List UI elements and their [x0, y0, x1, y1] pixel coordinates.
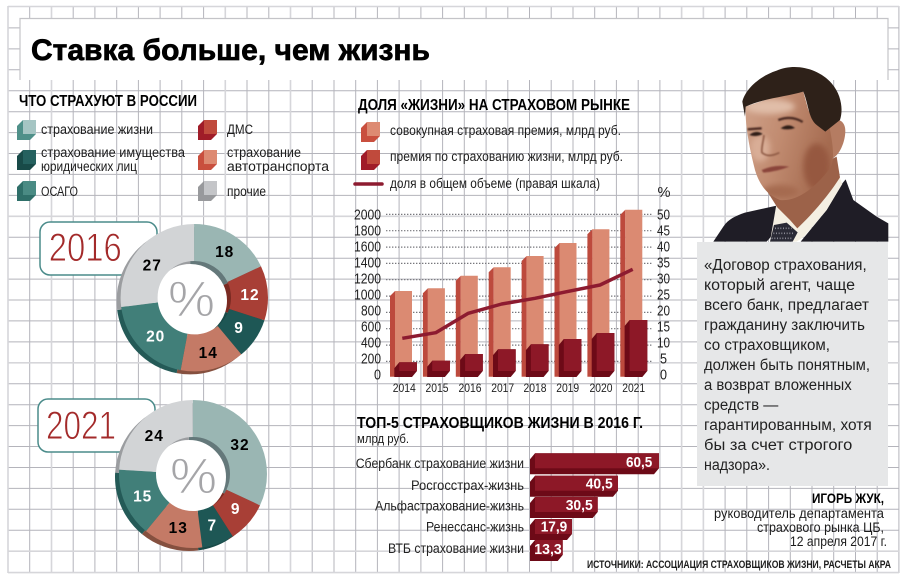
- face: [746, 92, 833, 200]
- donut chart 2016: %: [168, 271, 215, 327]
- donut chart 2021: [133, 418, 250, 537]
- row: VTB: [388, 540, 563, 561]
- row: Renaissance: [426, 519, 572, 540]
- legend: insurance types: [17, 120, 329, 201]
- legend item: total premium: [361, 122, 621, 142]
- donut chart 2021: 7: [207, 518, 217, 534]
- neck: [767, 157, 840, 228]
- legend item: motor insurance: автотранспорта: [227, 159, 329, 174]
- year labels: 2018: [524, 381, 547, 395]
- row: Alfa: 30,5: [566, 498, 593, 514]
- donut chart 2021: 15: [133, 488, 152, 506]
- quote box: гарантированным, хотя: [704, 417, 872, 434]
- left axis labels: 1800: [354, 224, 381, 240]
- quote box: [697, 242, 888, 486]
- right axis labels: 45: [657, 224, 670, 240]
- donut chart 2021: 13: [169, 520, 188, 537]
- right axis labels: 30: [657, 272, 670, 288]
- left axis labels: 1400: [354, 256, 381, 272]
- year labels: 2014: [393, 381, 416, 395]
- donut chart 2016: 20: [146, 328, 165, 346]
- quote attribution: руководитель департамента: [714, 506, 884, 521]
- heading: what is insured: ЧТО СТРАХУЮТ В РОССИИ: [19, 93, 197, 110]
- legend item: DMS: [198, 120, 253, 140]
- chart legend: [355, 122, 623, 191]
- year labels: 2017: [491, 381, 514, 395]
- donut chart 2021: %: [170, 448, 217, 504]
- legend item: motor insurance: страхование: [227, 145, 301, 160]
- legend item: OSAGO: [17, 181, 78, 201]
- legend item: life premium: премия по страхованию жизни, млрд руб.: [390, 149, 623, 164]
- legend item: total premium: совокупная страховая премия, млрд руб.: [390, 123, 621, 138]
- ear: [828, 120, 845, 159]
- quote box: гражданину заключить: [704, 317, 865, 334]
- heading: top 5 life insurers: млрд руб.: [357, 431, 409, 446]
- bar chart: top 5 insurers: [356, 453, 659, 561]
- donut chart 2016: [135, 243, 260, 362]
- hair: [742, 67, 842, 132]
- title: Ставка больше, чем жизнь: [31, 34, 430, 67]
- quote box: «Договор страхования,: [704, 257, 867, 274]
- left axis labels: 1000: [354, 288, 381, 304]
- quote box: надзора».: [704, 457, 770, 474]
- left axis labels: 800: [361, 304, 381, 320]
- row: Rosgosstrakh: [411, 476, 618, 497]
- donut chart 2016: 9: [234, 320, 244, 337]
- row: Alfa: [375, 497, 598, 518]
- donut chart 2021: 24: [145, 428, 164, 445]
- year labels: [393, 381, 645, 395]
- donut chart 2016: 14: [199, 345, 218, 362]
- row: VTB: 13,3: [534, 542, 562, 558]
- year badge 2016: [40, 222, 157, 275]
- quote box: а возврат вложенных: [704, 377, 852, 394]
- quote box: средств —: [704, 397, 779, 414]
- legend item: corporate property: [17, 145, 185, 174]
- quote box: всего банк, предлагает: [704, 297, 869, 314]
- quote box: бы за счет строгого: [704, 437, 852, 454]
- right axis labels: [657, 185, 671, 384]
- heading: top 5 life insurers: [357, 415, 643, 446]
- right axis labels: %: [658, 185, 671, 201]
- year labels: 2020: [590, 381, 613, 395]
- quote attribution: страхового рынка ЦБ,: [757, 520, 884, 535]
- right axis labels: 0: [660, 368, 667, 384]
- right axis labels: 35: [657, 256, 670, 272]
- left axis labels: 200: [361, 352, 381, 368]
- quote attribution: 12 апреля 2017 г.: [790, 534, 887, 549]
- left axis labels: 2000: [354, 208, 381, 224]
- row: Sberbank: [356, 453, 659, 474]
- right axis labels: 50: [657, 208, 670, 224]
- shirt: [770, 177, 842, 242]
- combo chart: premiums and share: [354, 185, 671, 395]
- right axis labels: 25: [657, 288, 670, 304]
- donut chart 2016: 18: [215, 244, 234, 261]
- title: [20, 18, 888, 80]
- donut chart 2021: 32: [230, 437, 250, 454]
- row: Rosgosstrakh: Росгосстрах-жизнь: [411, 478, 524, 493]
- legend item: other: [198, 181, 266, 201]
- life premium bars: [394, 320, 647, 377]
- legend item: life insurance: страхование жизни: [41, 122, 153, 137]
- quote attribution: [714, 491, 887, 549]
- legend item: life premium: [361, 149, 623, 170]
- left axis labels: [354, 208, 381, 384]
- row: VTB: ВТБ страхование жизни: [388, 541, 524, 556]
- donut chart 2016: 27: [143, 258, 162, 274]
- right axis labels: 5: [660, 352, 667, 368]
- left axis labels: 600: [361, 320, 381, 336]
- year labels: 2015: [426, 381, 449, 395]
- row: Sberbank: Сбербанк страхование жизни: [356, 456, 524, 471]
- year badge 2021: 2021: [46, 404, 116, 448]
- year badge 2021: [38, 399, 155, 452]
- right axis labels: 40: [657, 240, 670, 256]
- legend item: OSAGO: ОСАГО: [41, 184, 78, 199]
- quote attribution: ИГОРЬ ЖУК,: [812, 491, 884, 506]
- legend item: share line: доля в общем объеме (правая шкала): [390, 176, 600, 191]
- left axis labels: 0: [374, 368, 381, 384]
- row: Alfa: Альфастрахование-жизнь: [375, 499, 524, 514]
- right axis labels: 15: [657, 320, 670, 336]
- suit: [713, 179, 888, 242]
- legend item: corporate property: страхование имущества: [41, 145, 185, 160]
- quote box: который агент, чаще: [704, 277, 855, 294]
- total premium bars: [390, 210, 642, 377]
- left axis labels: 1600: [354, 240, 381, 256]
- row: Sberbank: 60,5: [626, 455, 652, 471]
- legend item: life insurance: [17, 120, 153, 140]
- row: Renaissance: Ренессанс-жизнь: [426, 520, 524, 535]
- row: Renaissance: 17,9: [541, 520, 567, 536]
- legend item: other: прочие: [227, 184, 266, 199]
- year labels: 2019: [556, 381, 579, 395]
- year labels: 2016: [458, 381, 482, 395]
- heading: share of life insurance: ДОЛЯ «ЖИЗНИ» НА СТРАХОВОМ РЫНКЕ: [358, 97, 630, 114]
- legend item: motor insurance: [198, 145, 329, 174]
- tie: [770, 223, 798, 242]
- eyes and brows: [748, 118, 803, 173]
- donut chart 2016: 12: [240, 287, 260, 304]
- year badge 2016: 2016: [49, 226, 122, 270]
- face shading: [745, 99, 830, 198]
- share line: [402, 269, 633, 338]
- quote box: должен быть понятным,: [704, 357, 870, 374]
- left axis labels: 1200: [354, 272, 381, 288]
- heading: top 5 life insurers: ТОП-5 СТРАХОВЩИКОВ ЖИЗНИ В 2016 Г.: [357, 415, 643, 432]
- year labels: 2021: [622, 381, 645, 395]
- donut chart 2021: 9: [231, 501, 241, 518]
- nose: [762, 135, 779, 155]
- right axis labels: 20: [657, 304, 670, 320]
- right axis labels: 10: [657, 336, 670, 352]
- quote box: со страховщиком,: [704, 337, 830, 354]
- mouth: [762, 166, 789, 173]
- left axis labels: 400: [361, 336, 381, 352]
- legend item: corporate property: юридических лиц: [41, 159, 137, 174]
- row: Rosgosstrakh: 40,5: [586, 476, 613, 492]
- legend item: DMS: ДМС: [227, 122, 253, 137]
- portrait photo: [713, 67, 888, 242]
